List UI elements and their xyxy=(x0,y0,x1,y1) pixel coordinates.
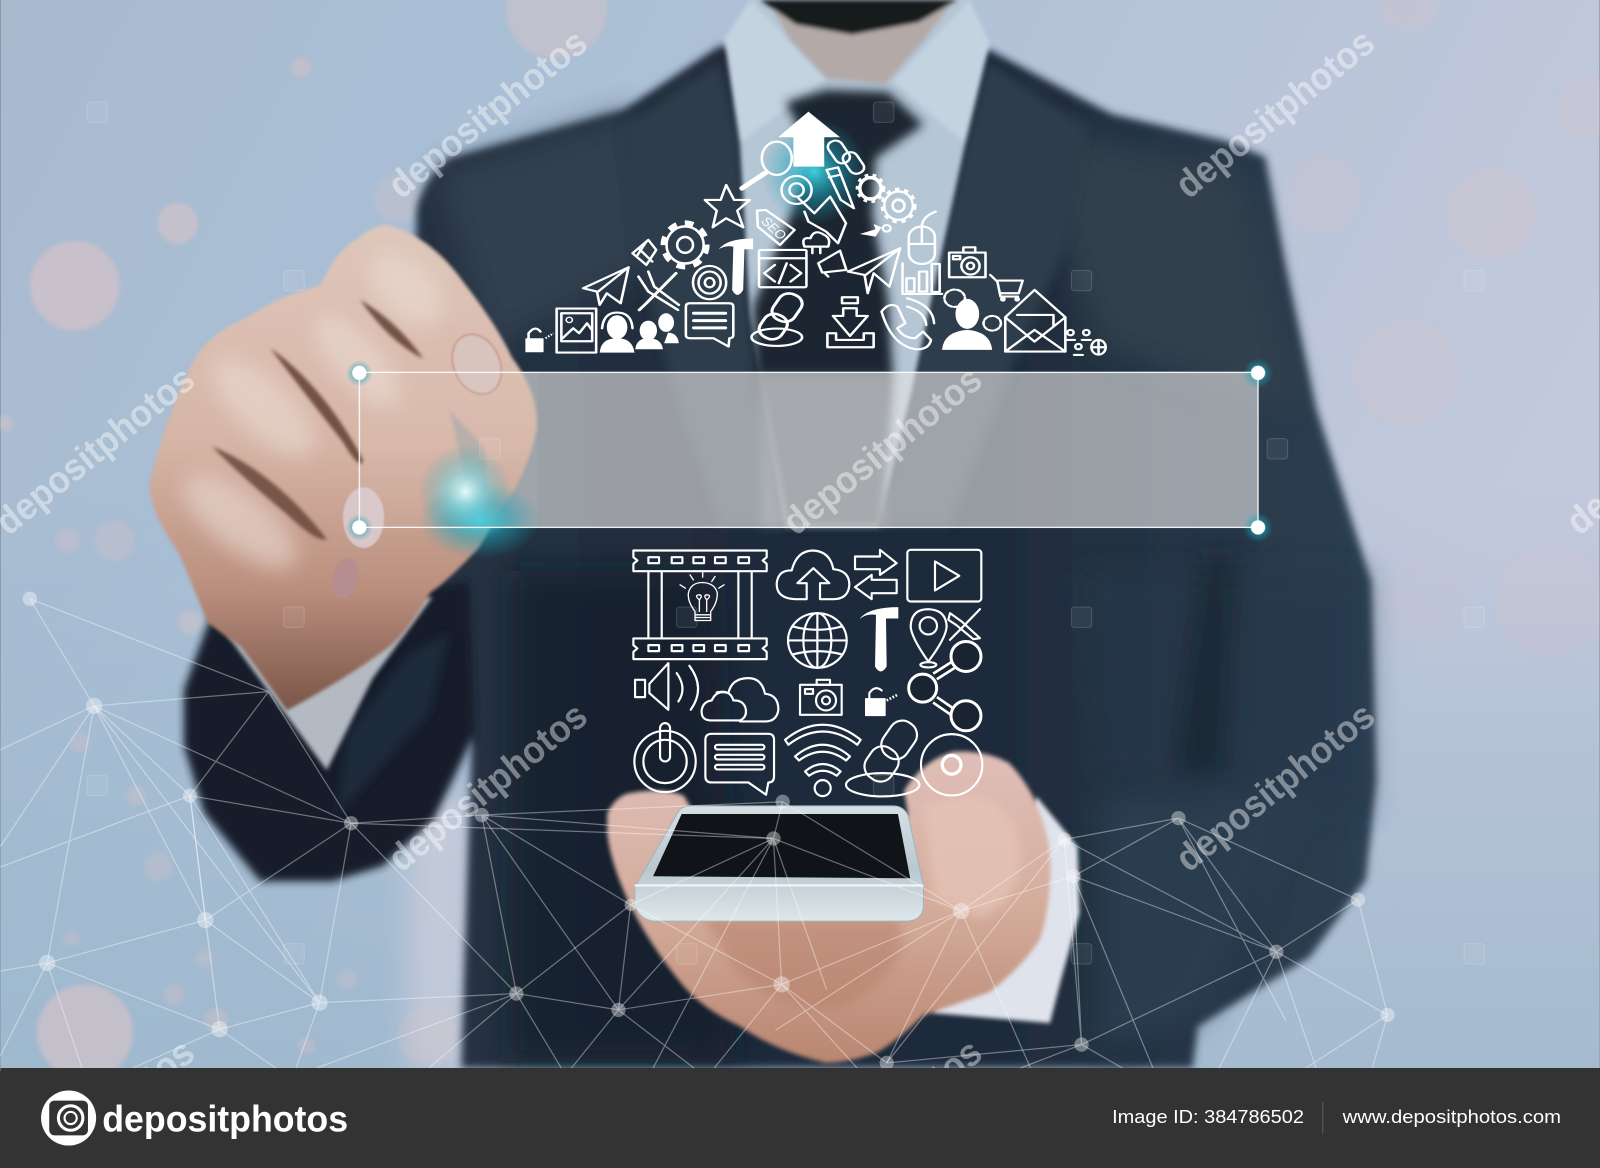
left arm sleeve and cuff xyxy=(184,581,475,881)
watermark text: depositphotos xyxy=(380,21,595,206)
mesh nodes xyxy=(23,592,1395,1070)
icon: pencil xyxy=(827,167,854,208)
icon: bar chart xyxy=(902,263,942,294)
man's suit jacket xyxy=(408,46,1376,1068)
icon: code window xyxy=(759,250,806,287)
phone screen xyxy=(653,814,910,878)
image id: Image ID: 384786502 xyxy=(1112,1106,1304,1127)
jacket right lapel xyxy=(878,61,1087,527)
icon: megaphone xyxy=(818,251,846,277)
icon: camera xyxy=(949,247,986,277)
icon: share nodes xyxy=(909,641,981,731)
collar left xyxy=(725,0,827,143)
icon: open envelope xyxy=(1005,290,1065,352)
icon: small gear xyxy=(857,175,884,201)
icon: click hand xyxy=(782,176,846,243)
icon: map pin xyxy=(911,609,947,667)
icon: link on disc xyxy=(751,290,806,346)
icon: chat bubble xyxy=(686,303,733,347)
icon: support team xyxy=(635,313,679,349)
watermark text: depositphotos xyxy=(380,694,595,879)
icon: cloud upload xyxy=(777,550,849,599)
lighter shirt band seen through panel xyxy=(760,372,888,527)
icon: globe xyxy=(788,613,847,668)
icon: lock xyxy=(865,688,897,716)
icon: hammer xyxy=(719,239,753,295)
necktie xyxy=(753,90,923,527)
icon: wrench and screwdriver xyxy=(948,609,980,640)
pen in hand xyxy=(450,411,488,493)
network mesh overlay xyxy=(0,592,1395,1070)
icon: link on disc xyxy=(846,715,922,796)
icon: transfer arrows xyxy=(855,550,897,599)
icon: SEO tag: SEO xyxy=(758,214,790,242)
icon: star xyxy=(705,185,750,227)
icon: speaker xyxy=(635,663,698,710)
icon: mouse xyxy=(909,212,936,264)
icon: up arrow xyxy=(778,112,840,167)
shirt and collar xyxy=(725,0,990,527)
icon block below panel xyxy=(633,550,982,796)
icon: lock xyxy=(525,329,553,352)
icon pyramid above panel xyxy=(525,112,1106,355)
site url: www.depositphotos.com xyxy=(1342,1106,1561,1127)
watermark text: depositphotos xyxy=(775,357,990,543)
icon: paper plane right xyxy=(848,248,900,293)
icon: cloud xyxy=(803,232,829,253)
icon: people and globe xyxy=(1066,330,1106,355)
icon: wifi xyxy=(785,725,861,796)
icon: wrench and screwdriver xyxy=(638,272,679,310)
icon: clouds xyxy=(702,678,778,721)
panel outline with corner dots xyxy=(346,358,1273,543)
icon: headset user xyxy=(600,313,634,353)
icon: film strip with bulb xyxy=(633,550,767,659)
collar right xyxy=(893,0,990,143)
lower hand holding phone xyxy=(607,752,1050,1063)
icon: shopping cart xyxy=(990,275,1023,301)
icon: chain link xyxy=(825,138,867,176)
icon: download xyxy=(827,297,874,347)
icon: large gear xyxy=(882,189,915,222)
jacket left lapel xyxy=(623,61,786,527)
panel tint over hand and glow xyxy=(359,372,541,559)
icon: wrench mini xyxy=(860,224,891,237)
icon: disc xyxy=(921,734,982,795)
icon: camera xyxy=(800,680,842,715)
icon: paper plane left xyxy=(583,267,629,305)
icon: chat bubble xyxy=(705,734,774,795)
finger creases xyxy=(212,300,423,540)
icon: person with gears xyxy=(942,290,1001,350)
logo mark xyxy=(41,1090,96,1146)
icon: big gear xyxy=(663,223,707,267)
neck and beard xyxy=(760,0,957,84)
icon: target xyxy=(693,266,726,299)
icon: magnifier xyxy=(742,142,792,188)
icon: SEO tag xyxy=(757,210,795,245)
watermark camera marks xyxy=(87,102,1484,964)
icon: power button xyxy=(634,723,696,792)
icon: puzzle squares xyxy=(633,240,656,265)
watermark text: depositphotos xyxy=(1167,21,1382,206)
icon: hammer xyxy=(859,607,898,671)
jacket shading xyxy=(439,112,1367,1061)
left hand pointing with pen xyxy=(150,225,537,710)
arrow glow xyxy=(761,118,867,224)
icon: phone call xyxy=(882,298,934,349)
translucent text panel xyxy=(359,372,1258,527)
logo wordmark: depositphotos xyxy=(102,1098,348,1139)
finger highlights xyxy=(170,237,457,586)
icon: picture xyxy=(557,309,596,353)
smartphone xyxy=(635,806,923,921)
divider xyxy=(1322,1102,1323,1133)
icon: video player xyxy=(907,550,981,601)
right shirt cuff xyxy=(933,797,1080,1023)
fingernails xyxy=(443,325,511,404)
footer bar xyxy=(0,1068,1600,1168)
watermark text: depositphotos xyxy=(1167,694,1382,879)
